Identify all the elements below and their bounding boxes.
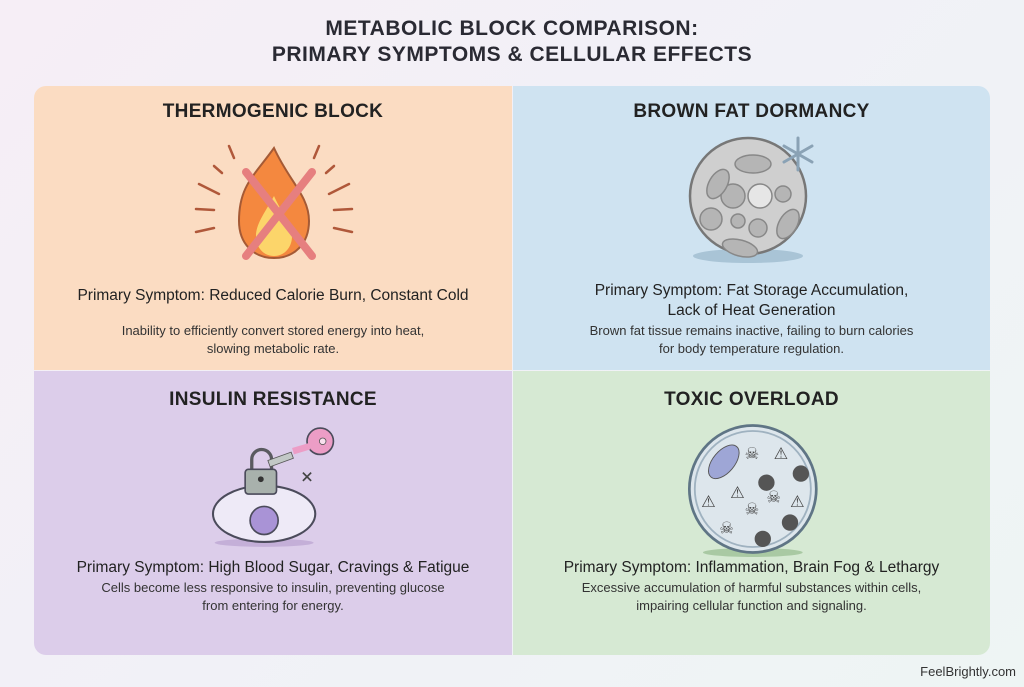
description <box>101 580 445 613</box>
primary symptom: Primary Symptom: High Blood Sugar, Cravings & Fatigue <box>77 559 469 576</box>
icon: toxic cell: ⚠ <box>701 492 716 511</box>
panel: thermogenic block <box>34 86 512 370</box>
icon: locked cell with key <box>212 427 334 547</box>
description <box>122 323 424 356</box>
icon: toxic cell: ⚠ <box>730 483 745 502</box>
icon: toxic cell: ⚠ <box>790 492 805 511</box>
heading: TOXIC OVERLOAD <box>664 389 839 410</box>
title: METABOLIC BLOCK COMPARISON: <box>325 17 699 40</box>
panel: brown fat dormancy <box>513 86 990 370</box>
panel: insulin resistance <box>34 371 512 655</box>
description: Excessive accumulation of harmful substances within cells, <box>582 580 921 595</box>
icon: toxic cell: ☠ <box>719 518 734 537</box>
title <box>272 17 752 66</box>
icon: toxic cell <box>688 424 818 557</box>
primary symptom: Primary Symptom: Inflammation, Brain Fog & Lethargy <box>564 559 939 576</box>
icon: dormant cell <box>688 136 814 263</box>
description: from entering for energy. <box>202 598 344 613</box>
description: impairing cellular function and signaling. <box>636 598 867 613</box>
description: for body temperature regulation. <box>659 341 844 356</box>
heading: THERMOGENIC BLOCK <box>163 101 383 122</box>
description: Cells become less responsive to insulin, preventing glucose <box>101 580 445 595</box>
icon: toxic cell: ⚠ <box>774 444 788 463</box>
primary symptom: Lack of Heat Generation <box>667 302 836 319</box>
icon: toxic cell: ☠ <box>745 444 759 463</box>
title: PRIMARY SYMPTOMS & CELLULAR EFFECTS <box>272 43 752 66</box>
heading: BROWN FAT DORMANCY <box>633 101 870 122</box>
primary symptom: Primary Symptom: Reduced Calorie Burn, Constant Cold <box>77 287 469 304</box>
footer brand: FeelBrightly.com <box>920 664 1016 679</box>
icon: toxic cell: ☠ <box>745 499 759 518</box>
primary symptom: Primary Symptom: Fat Storage Accumulation, <box>595 282 908 299</box>
icon: fire crossed <box>194 144 354 260</box>
heading: INSULIN RESISTANCE <box>169 389 377 410</box>
panel: toxic overload <box>513 371 990 655</box>
description <box>590 323 913 356</box>
description: slowing metabolic rate. <box>207 341 339 356</box>
description: Brown fat tissue remains inactive, failing to burn calories <box>590 323 913 338</box>
description: Inability to efficiently convert stored energy into heat, <box>122 323 424 338</box>
primary symptom <box>595 282 908 319</box>
description <box>582 580 921 613</box>
icon: toxic cell: ☠ <box>766 488 781 507</box>
